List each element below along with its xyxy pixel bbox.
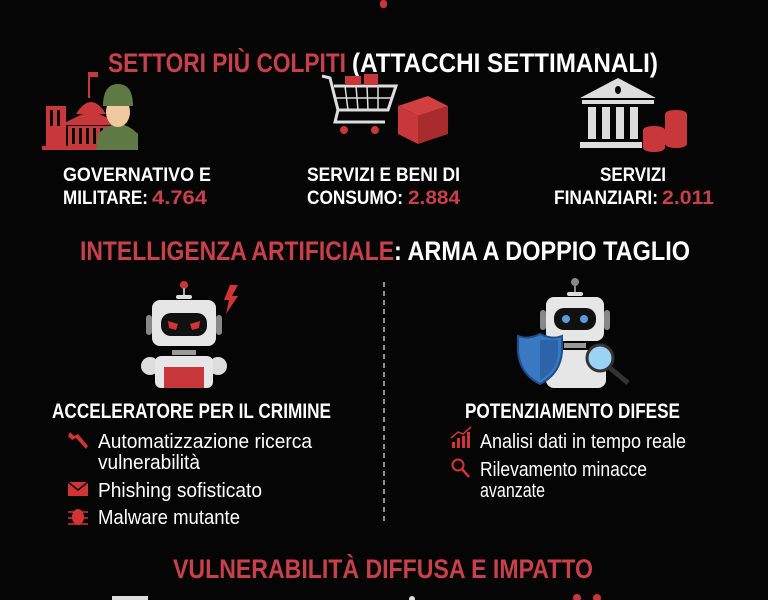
- list: crime uses: vulnerabilità: [98, 452, 201, 474]
- label: finanziari: FINANZIARI:: [554, 188, 658, 209]
- label: governativo: MILITARE:: [63, 188, 148, 209]
- icon: bank and coins: [580, 78, 687, 152]
- label: servizi beni: CONSUMO:: [307, 188, 403, 209]
- label: finanziari: SERVIZI: [600, 165, 666, 186]
- top connector: [380, 0, 387, 8]
- bottom icon hints: [112, 594, 601, 600]
- list: defense uses: Analisi dati in tempo reale: [480, 431, 686, 453]
- subheading: acceleratore: ACCELERATORE PER IL CRIMINE: [52, 400, 331, 423]
- heading: settori: (ATTACCHI SETTIMANALI): [352, 48, 658, 78]
- heading: intelligenza artificiale: INTELLIGENZA ARTIFICIALE: [80, 236, 394, 266]
- heading: intelligenza artificiale: [80, 236, 690, 266]
- icon: malicious robot: [141, 281, 238, 388]
- label: governativo: GOVERNATIVO E: [63, 165, 211, 186]
- label: servizi beni: SERVIZI E BENI DI: [307, 165, 460, 186]
- heading: vulnerabilità: VULNERABILITÀ DIFFUSA E IMPATTO: [173, 553, 593, 584]
- label: finanziari: [554, 165, 714, 209]
- list: defense uses: Rilevamento minacce: [480, 459, 647, 481]
- label: servizi beni: [307, 165, 460, 209]
- label: governativo: [63, 165, 211, 209]
- list: crime uses: Phishing sofisticato: [98, 480, 262, 502]
- list: crime uses: Automatizzazione ricerca: [98, 431, 313, 453]
- heading: intelligenza artificiale: : ARMA A DOPPIO TAGLIO: [394, 236, 690, 266]
- heading: settori: [108, 47, 658, 78]
- list: crime uses: Malware mutante: [98, 507, 240, 529]
- icon: shopping cart and box: [322, 74, 448, 144]
- icon: defensive robot: [518, 278, 628, 388]
- icon: government and military: [42, 72, 138, 150]
- list: crime uses: [68, 431, 313, 529]
- label: servizi beni: 2.884: [408, 188, 460, 209]
- subheading: potenziamento: POTENZIAMENTO DIFESE: [465, 400, 680, 423]
- label: finanziari: 2.011: [662, 188, 714, 209]
- label: governativo: 4.764: [152, 188, 208, 209]
- heading: settori: SETTORI PIÙ COLPITI: [108, 47, 346, 78]
- list: defense uses: avanzate: [480, 480, 545, 502]
- list: defense uses: [451, 427, 686, 502]
